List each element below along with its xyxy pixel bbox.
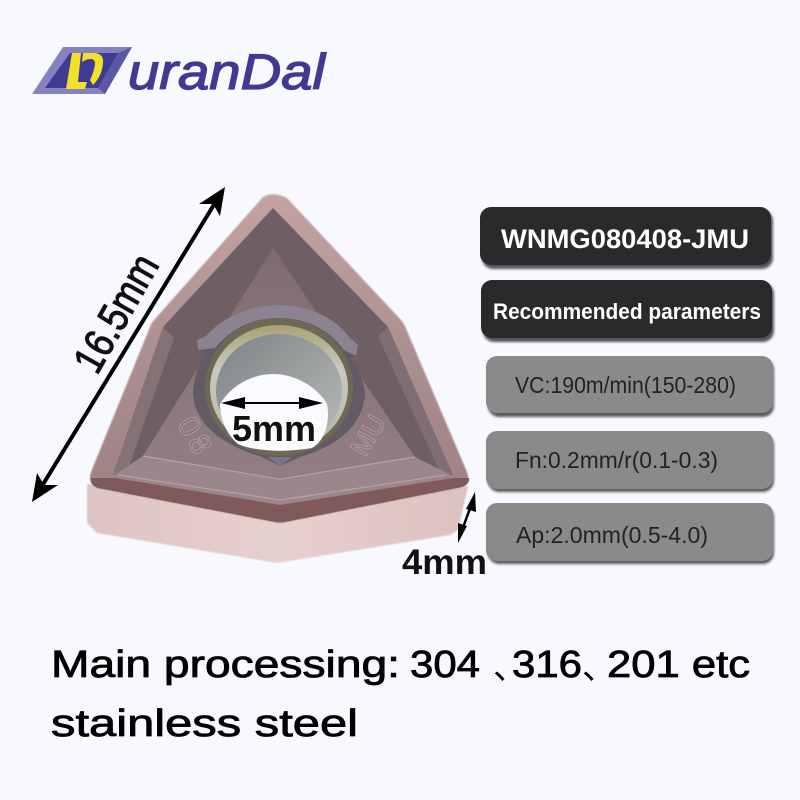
panel: model number: WNMG080408-JMU <box>501 224 749 254</box>
chamfer highlight lines <box>118 456 446 500</box>
metal hole rim <box>205 318 353 456</box>
dimension label: 5mm: 5mm <box>232 408 316 449</box>
text: main processing materials: 316 <box>512 644 582 686</box>
chipbreaker ring around hole <box>193 305 365 466</box>
logo: DuranDal <box>32 44 327 100</box>
logo wordmark: uranDal <box>128 44 327 100</box>
dimension arrow: 4mm <box>458 492 476 543</box>
panel: recommended parameters heading: Recommended parameters <box>493 299 761 324</box>
text: main processing materials: 304 <box>410 644 480 686</box>
through hole <box>220 374 328 451</box>
hole bore wall <box>216 334 342 448</box>
text: main processing materials: 、 <box>582 640 616 689</box>
panel: Ap parameter: Ap:2.0mm(0.5-4.0) <box>516 522 708 548</box>
panel: VC parameter: VC:190m/min(150-280) <box>515 372 736 398</box>
insert recessed face <box>113 208 453 505</box>
text: main processing materials: 、 <box>493 640 527 689</box>
lower chamfer strip <box>113 456 453 505</box>
metal hole inner chamfer <box>210 325 348 451</box>
insert side wall <box>87 484 468 563</box>
text: main processing materials: stainless steel <box>51 703 358 745</box>
insert top rim <box>90 194 468 522</box>
panel: VC parameter <box>486 356 774 417</box>
left bevel shading <box>113 327 174 475</box>
text: main processing materials: 201 etc <box>607 644 750 686</box>
engraved mark 08: 08 <box>171 411 220 463</box>
dimension arrow: 5mm <box>221 397 323 409</box>
text: main processing materials <box>51 640 750 745</box>
panel: Fn parameter <box>486 431 774 492</box>
panel: recommended parameters heading <box>481 280 774 342</box>
logo parallelogram badge <box>32 47 132 94</box>
dimension arrow: 16.5mm <box>32 187 225 502</box>
dimension label: 4mm: 4mm <box>402 543 487 582</box>
text: main processing materials: Main processing: <box>51 644 400 686</box>
panel: model number <box>480 207 773 269</box>
dimension label: 16.5mm: 16.5mm <box>64 246 168 380</box>
dark lower band <box>91 478 469 522</box>
cutting insert illustration <box>87 194 469 563</box>
panel: Ap parameter <box>486 503 774 564</box>
insert inner land <box>143 248 415 478</box>
right bevel shading <box>378 327 453 475</box>
engraved mark MU: MU <box>345 410 392 461</box>
panel: Fn parameter: Fn:0.2mm/r(0.1-0.3) <box>515 447 718 473</box>
